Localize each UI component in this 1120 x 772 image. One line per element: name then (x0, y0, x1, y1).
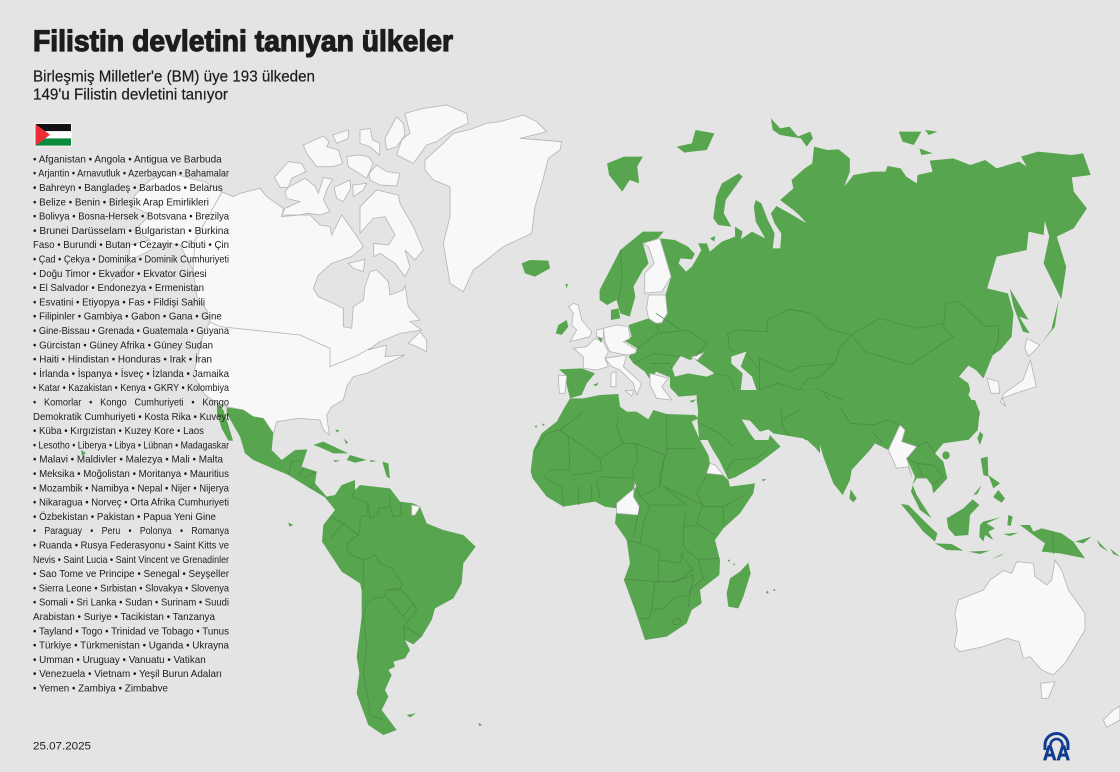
subtitle (33, 68, 315, 104)
region: Africa and Arabia, recognising (531, 390, 820, 640)
country list: • İrlanda • İspanya • İsveç • İzlanda • Jamaika (33, 367, 229, 380)
region: South and East Asia, Oceania (820, 400, 1120, 727)
country list: • Mozambik • Namibya • Nepal • Nijer • Nijerya (33, 482, 229, 494)
logo: Anadolu Agency (1043, 734, 1070, 765)
country list: • Türkiye • Türkmenistan • Uganda • Ukrayna (33, 640, 229, 652)
country list: Nevis • Saint Lucia • Saint Vincent ve Grenadinler (33, 554, 229, 566)
seas (672, 353, 714, 377)
country list: Demokratik Cumhuriyeti • Kosta Rika • Kuveyt (33, 411, 229, 423)
country list: • Tayland • Togo • Trinidad ve Tobago • Tunus (33, 625, 229, 637)
country list: • Çad • Çekya • Dominika • Dominik Cumhuriyeti (33, 254, 229, 266)
country list: • Somali • Sri Lanka • Sudan • Surinam • Suudi (33, 597, 229, 609)
country list: • Arjantin • Arnavutluk • Azerbaycan • Bahamalar (33, 168, 229, 180)
country list: • Katar • Kazakistan • Kenya • GKRY • Kolombiya (33, 382, 229, 394)
country list: • Afganistan • Angola • Antigua ve Barbuda (33, 153, 222, 165)
country list: • Yemen • Zambiya • Zimbabve (33, 682, 168, 694)
country list: • El Salvador • Endonezya • Ermenistan (33, 282, 204, 294)
borders (618, 250, 622, 300)
icon: Palestinian flag (34, 123, 72, 146)
country list: • Venezuela • Vietnam • Yeşil Burun Adaları (33, 668, 222, 680)
country list: • Meksika • Moğolistan • Moritanya • Mauritius (33, 468, 229, 480)
country list: • Umman • Uruguay • Vanuatu • Vatikan (33, 654, 206, 666)
white countries (643, 238, 671, 293)
date: 25.07.2025 (33, 740, 91, 752)
country list: • Nikaragua • Norveç • Orta Afrika Cumhuriyeti (33, 497, 229, 509)
country list: • Filipinler • Gambiya • Gabon • Gana • Gine (33, 311, 222, 323)
country list: • Paraguay • Peru • Polonya • Romanya (33, 525, 229, 537)
country list: • Haiti • Hindistan • Honduras • Irak • İran (33, 353, 212, 366)
country list: • Doğu Timor • Ekvador • Ekvator Ginesi (33, 268, 207, 280)
world map (81, 105, 1120, 735)
country list: • Sierra Leone • Sırbistan • Slovakya • Slovenya (33, 582, 229, 594)
subtitle: Birleşmiş Milletler'e (BM) üye 193 ülkeden (33, 68, 315, 86)
country list: • Belize • Benin • Birleşik Arap Emirlikleri (33, 196, 209, 208)
country list: Faso • Burundi • Butan • Cezayir • Cibuti • Çin (33, 239, 229, 251)
region: Central and South America, recognising (217, 403, 482, 735)
country list (33, 153, 229, 694)
country list: • Brunei Darüsselam • Bulgaristan • Burkina (33, 225, 229, 237)
country list: Arabistan • Suriye • Tacikistan • Tanzanya (33, 611, 215, 623)
subtitle: 149'u Filistin devletini tanıyor (33, 86, 228, 104)
country list: • Bolivya • Bosna-Hersek • Botsvana • Brezilya (33, 211, 229, 223)
logo: Anadolu Agency: AA (1043, 742, 1070, 765)
country list: • Lesotho • Liberya • Libya • Lübnan • Madagaskar (33, 439, 229, 451)
country list: • Komorlar • Kongo Cumhuriyeti • Kongo (33, 396, 229, 408)
country list: • Gürcistan • Güney Afrika • Güney Sudan (33, 339, 213, 351)
country list: • Ruanda • Rusya Federasyonu • Saint Kitts ve (33, 540, 229, 552)
icon: Hawaii (81, 450, 86, 456)
region: western Europe, not recognising (556, 284, 672, 400)
region: Russia, Europe and Asia, recognising (600, 118, 1091, 440)
title: Filistin devletini tanıyan ülkeler (33, 25, 453, 58)
country list: • Özbekistan • Pakistan • Papua Yeni Gine (33, 511, 216, 523)
country list: • Malavi • Maldivler • Malezya • Mali • Malta (33, 454, 223, 466)
region: North America and Greenland, not recognising (110, 105, 562, 435)
country list: • Küba • Kırgızistan • Kuzey Kore • Laos (33, 425, 204, 437)
country list: • Bahreyn • Bangladeş • Barbados • Belarus (33, 182, 223, 194)
country list: • Gine-Bissau • Grenada • Guatemala • Guyana (33, 325, 229, 337)
country list: • Esvatini • Etiyopya • Fas • Fildişi Sahili (33, 296, 205, 308)
country list: • Sao Tome ve Principe • Senegal • Seyşeller (33, 568, 229, 580)
